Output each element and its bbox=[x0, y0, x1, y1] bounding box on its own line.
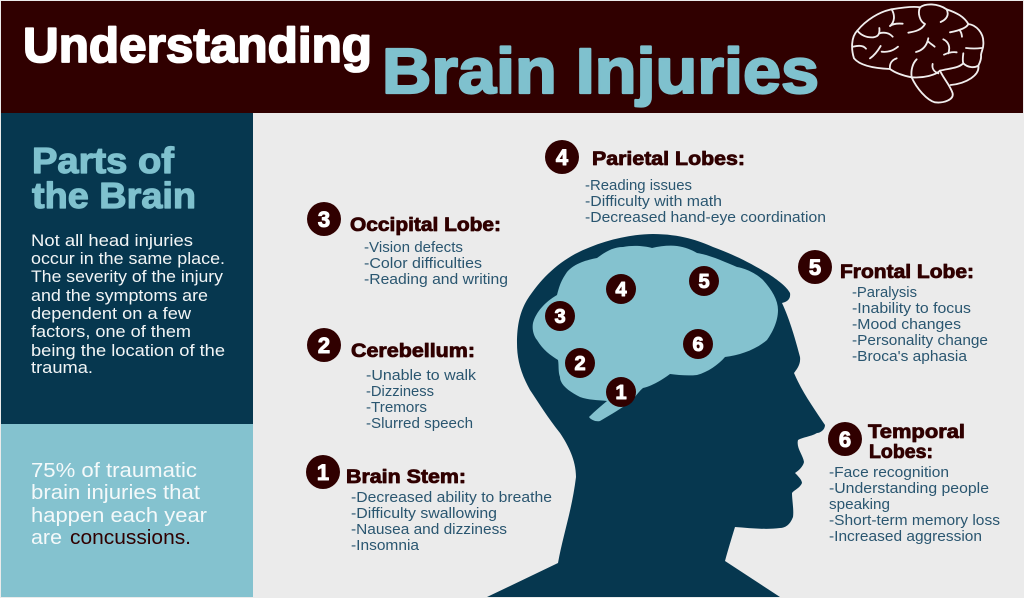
heading: parts of the brain: Parts of bbox=[32, 140, 175, 181]
section: temporal lobes bbox=[828, 422, 1000, 545]
section: parietal lobes: -Decreased hand-eye coordination bbox=[585, 210, 826, 226]
section: temporal lobes: -Short-term memory loss bbox=[829, 513, 1000, 529]
section: cerebellum: -Slurred speech bbox=[366, 416, 473, 432]
text block: intro: trauma. bbox=[31, 358, 93, 377]
brain shape bbox=[533, 246, 778, 421]
marker 6: 6 bbox=[692, 334, 704, 356]
section: occipital lobe: -Reading and writing bbox=[364, 272, 508, 288]
section: frontal lobe: -Paralysis bbox=[852, 285, 917, 301]
heading: parts of the brain: the Brain bbox=[32, 175, 196, 216]
text block: intro bbox=[31, 231, 225, 377]
marker 3 bbox=[545, 301, 575, 331]
section: brain stem: 1 bbox=[317, 460, 329, 485]
section: temporal lobes: -Understanding people bbox=[829, 481, 989, 497]
section: parietal lobes: -Reading issues bbox=[585, 178, 692, 194]
section: occipital lobe: -Color difficulties bbox=[364, 256, 482, 272]
marker 1 bbox=[606, 377, 636, 407]
section: frontal lobe: Frontal Lobe: bbox=[840, 262, 974, 283]
head silhouette with brain bbox=[487, 234, 825, 597]
title: Understanding: Understanding bbox=[23, 19, 372, 73]
marker 6 bbox=[683, 329, 713, 359]
section: cerebellum: 2 bbox=[318, 333, 330, 358]
text block: intro: Not all head injuries bbox=[31, 231, 193, 250]
header banner bbox=[1, 1, 1023, 113]
title: Brain Injuries: Brain Injuries bbox=[382, 35, 819, 107]
section: cerebellum: -Tremors bbox=[366, 400, 427, 416]
section: occipital lobe bbox=[307, 202, 508, 288]
text block: 75% statistic: brain injuries that bbox=[31, 482, 200, 504]
heading: parts of the brain bbox=[32, 140, 196, 216]
section: occipital lobe: -Vision defects bbox=[364, 240, 463, 256]
section: temporal lobes: speaking bbox=[829, 497, 890, 513]
section: frontal lobe: -Inability to focus bbox=[852, 301, 971, 317]
section: parietal lobes: 4 bbox=[556, 145, 569, 170]
marker 4 bbox=[606, 274, 636, 304]
section: temporal lobes: -Face recognition bbox=[829, 465, 949, 481]
text block: 75% statistic: concussions. bbox=[70, 527, 191, 549]
section: temporal lobes: Lobes: bbox=[869, 442, 933, 463]
marker 2 bbox=[565, 348, 595, 378]
section: cerebellum: -Dizziness bbox=[366, 384, 434, 400]
section: temporal lobes: Temporal bbox=[868, 422, 965, 443]
text block: 75% statistic: are bbox=[31, 527, 62, 549]
section: parietal lobes bbox=[545, 140, 826, 226]
section: parietal lobes: Parietal Lobes: bbox=[592, 149, 745, 170]
text block: 75% statistic: 75% of traumatic bbox=[31, 460, 197, 482]
section: brain stem: -Nausea and dizziness bbox=[351, 522, 507, 538]
panel: parts of the brain bbox=[1, 113, 253, 424]
section: frontal lobe: -Personality change bbox=[852, 333, 988, 349]
section: frontal lobe: 5 bbox=[809, 255, 821, 280]
section: temporal lobes: -Increased aggression bbox=[829, 529, 982, 545]
marker 5: 5 bbox=[698, 271, 710, 293]
section: brain stem: -Insomnia bbox=[351, 538, 420, 554]
section: cerebellum: -Unable to walk bbox=[366, 368, 477, 384]
text block: intro: The severity of the injury bbox=[31, 267, 224, 286]
text block: intro: and the symptoms are bbox=[31, 286, 208, 305]
marker 2: 2 bbox=[574, 353, 586, 375]
text block: intro: occur in the same place. bbox=[31, 249, 225, 268]
marker 4: 4 bbox=[615, 279, 627, 301]
section: frontal lobe: -Mood changes bbox=[852, 317, 961, 333]
section: frontal lobe: -Broca's aphasia bbox=[852, 349, 968, 365]
text block: intro: factors, one of them bbox=[31, 322, 191, 341]
section: brain stem: -Decreased ability to breathe bbox=[351, 490, 552, 506]
text block: intro: dependent on a few bbox=[31, 304, 192, 323]
section: brain stem: Brain Stem: bbox=[346, 467, 466, 488]
section: brain stem bbox=[306, 455, 552, 554]
section: brain stem: -Difficulty swallowing bbox=[351, 506, 497, 522]
section: temporal lobes: 6 bbox=[839, 427, 851, 452]
section: frontal lobe bbox=[798, 250, 988, 365]
section: occipital lobe: 3 bbox=[318, 207, 330, 232]
text block: 75% statistic: happen each year bbox=[31, 505, 207, 527]
marker 1: 1 bbox=[615, 382, 627, 404]
section: parietal lobes: -Difficulty with math bbox=[585, 194, 722, 210]
marker 3: 3 bbox=[554, 306, 566, 328]
icon: brain outline bbox=[852, 4, 983, 102]
section: cerebellum bbox=[307, 328, 477, 432]
marker 5 bbox=[689, 266, 719, 296]
section: occipital lobe: Occipital Lobe: bbox=[350, 215, 501, 236]
text block: intro: being the location of the bbox=[31, 341, 225, 360]
panel: concussion statistic bbox=[1, 424, 253, 597]
section: cerebellum: Cerebellum: bbox=[351, 341, 475, 362]
text block: 75% statistic bbox=[31, 460, 207, 549]
